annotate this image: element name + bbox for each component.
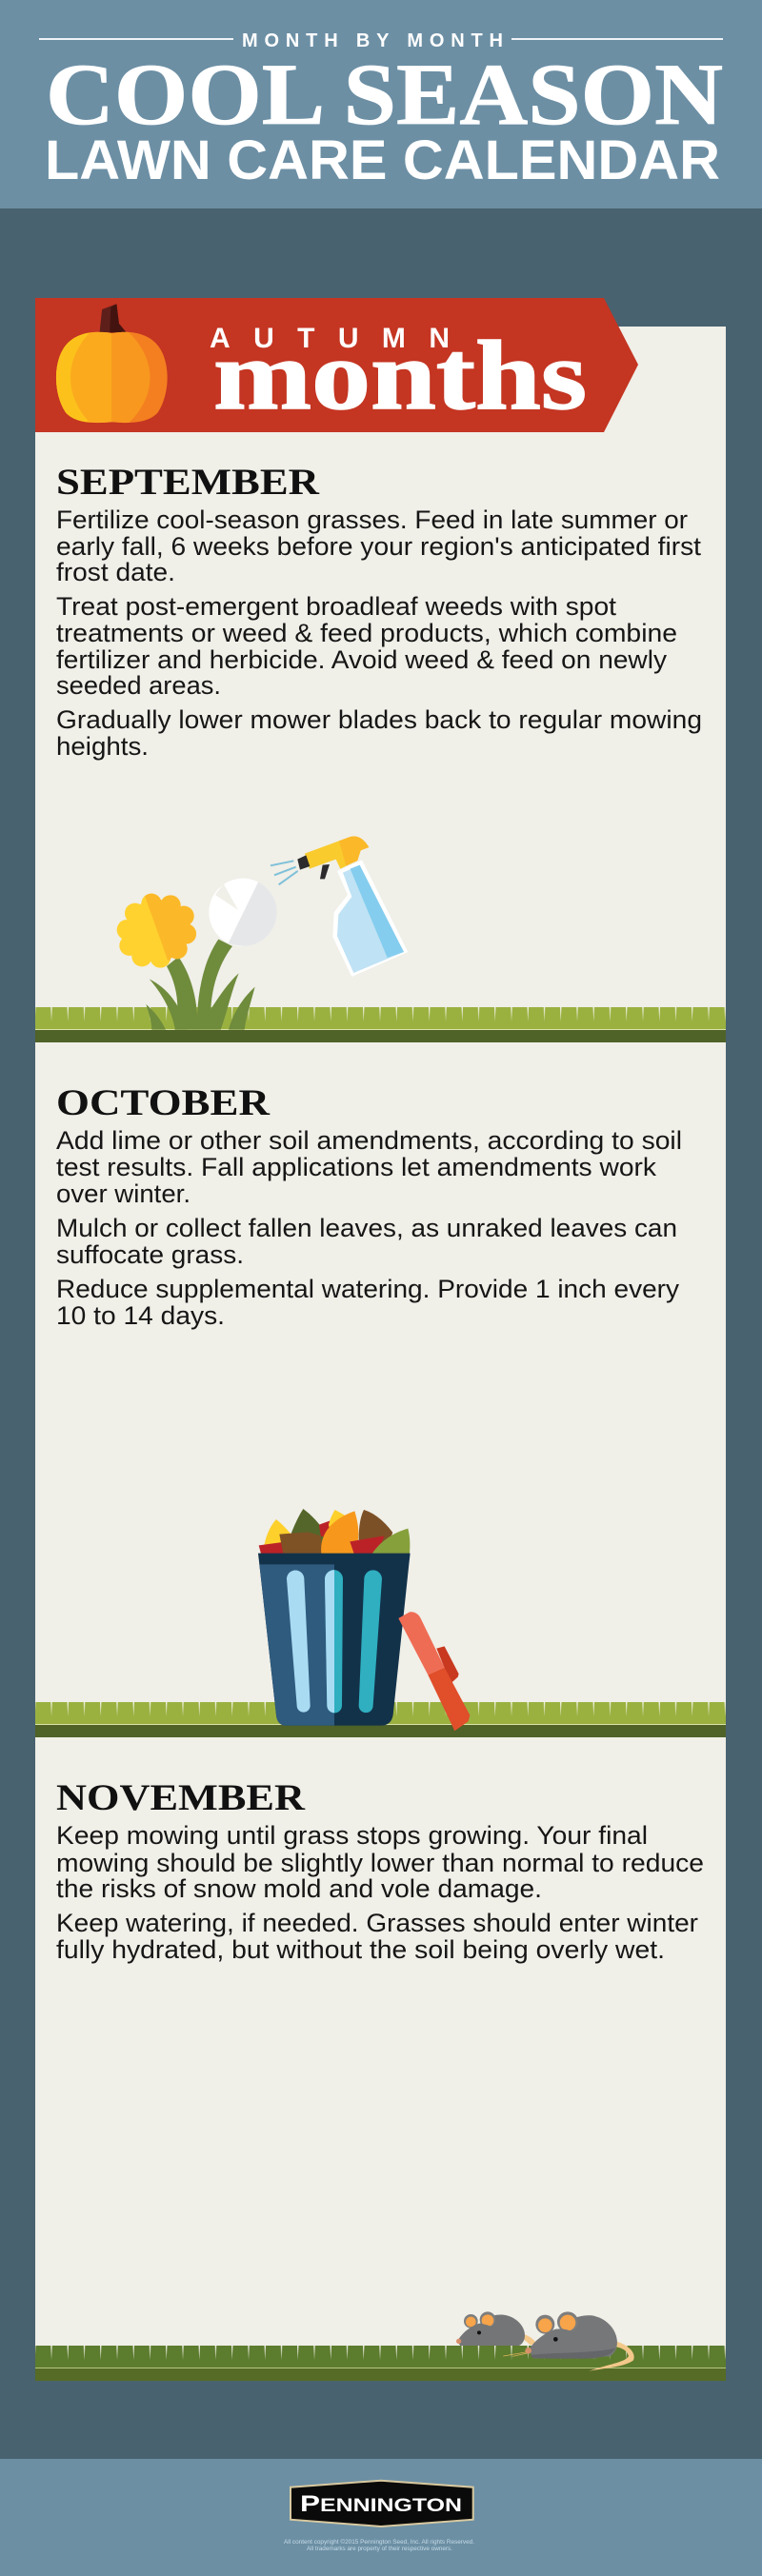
icon: pumpkin — [55, 304, 168, 423]
icon: trash can with leaves and lid — [258, 1509, 470, 1731]
header band — [0, 0, 762, 208]
text: october tips: Add lime or other soil amendments, according to soil — [56, 1126, 682, 1155]
text: november tips: Keep watering, if needed. Grasses should enter winter — [56, 1909, 698, 1937]
copyright note: All content copyright ©2015 Pennington Seed, Inc. All rights Reserved. — [284, 2538, 474, 2546]
text: november tips: fully hydrated, but without the soil being overly wet. — [56, 1935, 665, 1964]
icon: dandelion yellow flower — [117, 894, 196, 968]
icon: weed stems and leaves — [146, 940, 255, 1030]
text: october tips: Mulch or collect fallen leaves, as unraked leaves can — [56, 1214, 677, 1242]
copyright note: All trademarks are property of their respective owners. — [307, 2546, 452, 2552]
text: november tips — [56, 1821, 704, 1964]
section: october — [35, 1082, 726, 1737]
text: november tips: Keep mowing until grass stops growing. Your final — [56, 1821, 648, 1850]
grass strip: november — [35, 2346, 726, 2381]
text: october tips: Reduce supplemental watering. Provide 1 inch every — [56, 1275, 680, 1303]
title: cool season: COOL SEASON — [46, 46, 723, 143]
banner word: months: months — [213, 321, 587, 430]
text: september tips — [56, 505, 702, 761]
text: october tips: test results. Fall applications let amendments work — [56, 1153, 657, 1181]
text: september tips: treatments or weed & feed products, which combine — [56, 619, 677, 647]
icon: large vole — [503, 2311, 634, 2371]
text: october tips — [56, 1126, 682, 1330]
heading: october: OCTOBER — [56, 1082, 271, 1123]
footer band — [0, 2459, 762, 2576]
text: november tips: mowing should be slightly lower than normal to reduce — [56, 1849, 704, 1877]
grass strip: october — [35, 1702, 726, 1737]
text: september tips: Fertilize cool-season grasses. Feed in late summer or — [56, 505, 688, 534]
text: october tips: over winter. — [56, 1179, 190, 1208]
autumn months banner — [35, 298, 638, 432]
icon: spray lines — [271, 861, 298, 884]
icon: spray bottle — [297, 837, 408, 977]
logo: pennington — [291, 2481, 473, 2526]
text: october tips: 10 to 14 days. — [56, 1301, 225, 1330]
subtitle: lawn care calendar: LAWN CARE CALENDAR — [45, 129, 720, 191]
text: september tips: early fall, 6 weeks before your region's anticipated first — [56, 532, 702, 561]
cream content panel — [35, 327, 726, 2381]
text: september tips: Gradually lower mower blades back to regular mowing — [56, 705, 702, 734]
section: november — [35, 1777, 726, 2381]
text: october tips: suffocate grass. — [56, 1240, 244, 1269]
heading: november: NOVEMBER — [56, 1777, 306, 1818]
icon: dandelion and spray bottle — [117, 837, 408, 1030]
icon: leaves — [259, 1509, 410, 1554]
icon: small vole — [456, 2311, 536, 2346]
icon: can body — [258, 1554, 411, 1726]
text: september tips: fertilizer and herbicide. Avoid weed & feed on newly — [56, 645, 668, 674]
text: september tips: Treat post-emergent broadleaf weeds with spot — [56, 592, 617, 621]
heading: september: SEPTEMBER — [56, 462, 320, 503]
icon: can lid — [398, 1612, 470, 1731]
eyebrow: month by month: MONTH BY MONTH — [242, 30, 503, 51]
icon: voles — [456, 2311, 634, 2371]
text: september tips: heights. — [56, 732, 149, 761]
text: november tips: the risks of snow mold and vole damage. — [56, 1874, 542, 1903]
copyright note — [284, 2538, 474, 2552]
logo: pennington: P ENNINGTON — [300, 2491, 462, 2517]
grass strip: september — [35, 1007, 726, 1042]
section: september — [35, 462, 726, 1042]
icon: dandelion seed puff — [209, 879, 277, 946]
text: september tips: seeded areas. — [56, 671, 221, 700]
text: september tips: frost date. — [56, 558, 175, 586]
banner word: autumn: AUTUMN — [210, 323, 450, 354]
